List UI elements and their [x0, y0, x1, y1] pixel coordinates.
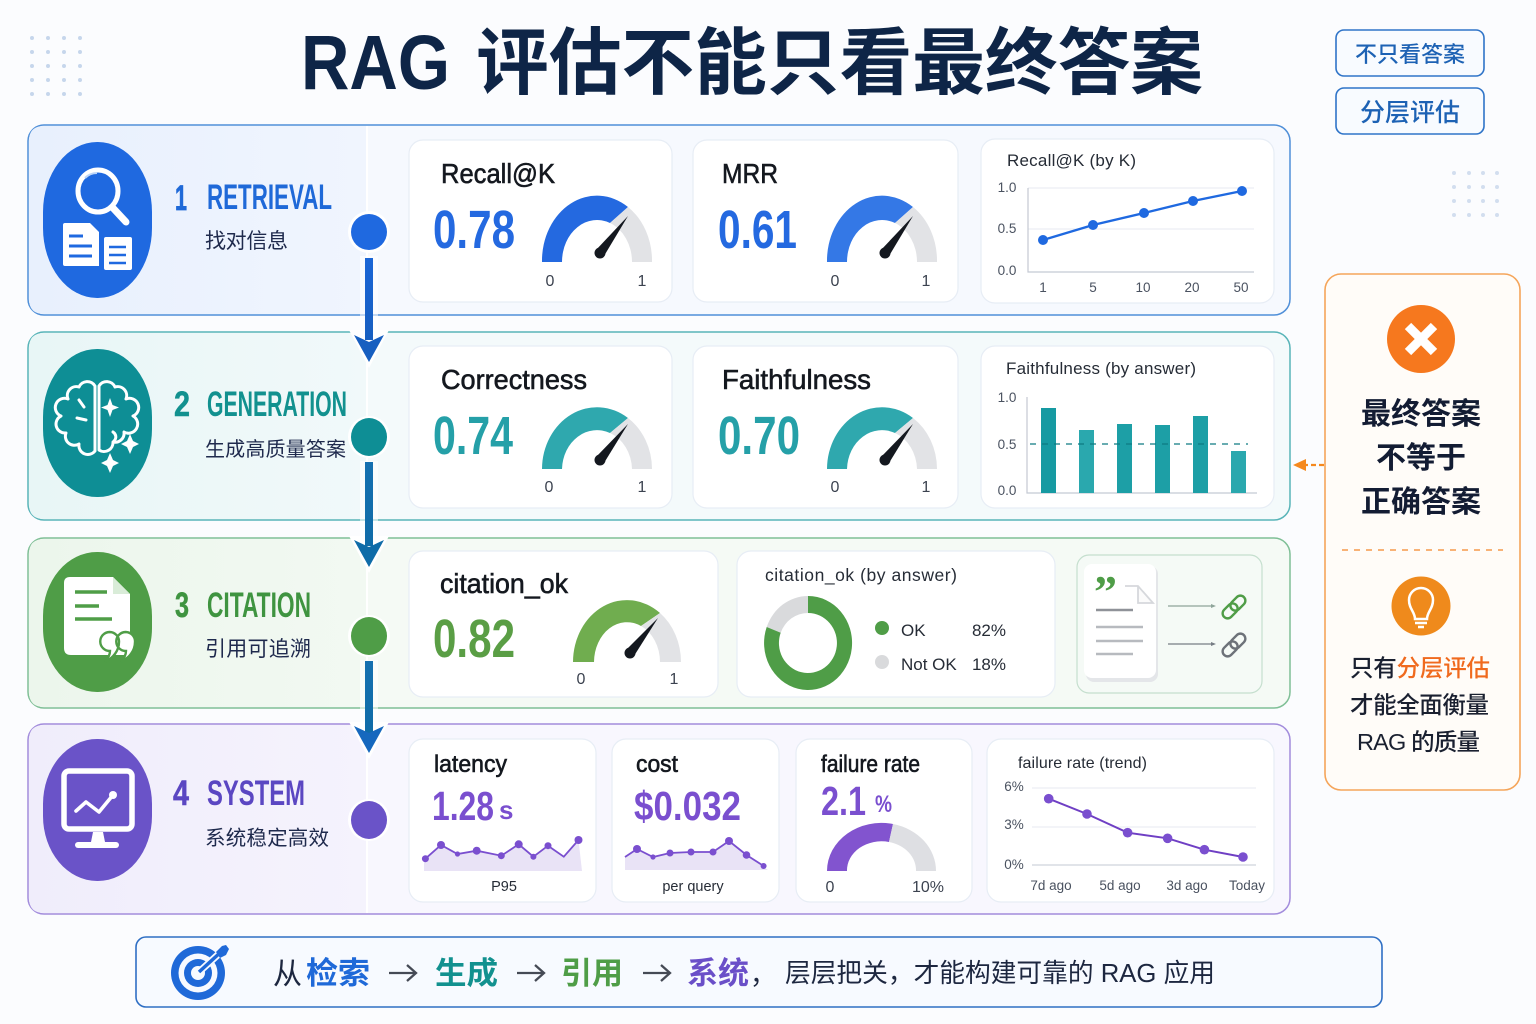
card: failure rate [796, 739, 972, 902]
card: latency [409, 739, 596, 902]
card: failure rate: 2.1 [821, 778, 866, 824]
gauge: 0.74 [542, 407, 652, 469]
card: Correctness [409, 346, 672, 508]
text: conclusion sentence: ， [750, 955, 776, 992]
panel: conclusion callout [1325, 274, 1520, 790]
text: final answer is not correct answer [1361, 398, 1481, 519]
title: RAG [301, 20, 450, 106]
arrows between stages [389, 965, 670, 981]
line chart: failure rate trend: 3d ago [1166, 878, 1208, 893]
sparkline: latency [422, 836, 582, 871]
gauge: 0.78 [542, 196, 652, 262]
tag: 不只看答案 [1336, 30, 1484, 76]
panel: system [28, 724, 1290, 914]
text: layered evaluation: RAG 的质量 [1357, 729, 1480, 755]
bar chart: Faithfulness by answer: 0.0 [998, 483, 1016, 498]
sparkline: cost [625, 837, 768, 870]
card: Recall@K: 0.78 [433, 200, 515, 260]
icon: cross [1387, 305, 1455, 373]
line chart: Recall@K by K: 50 [1233, 280, 1249, 295]
line chart: failure rate trend: Today [1229, 878, 1265, 893]
heading: generation: 2 [174, 385, 190, 424]
panel: retrieval [28, 125, 1290, 315]
heading: generation [174, 385, 347, 462]
card: MRR [693, 140, 958, 302]
card: Faithfulness: 0.70 [718, 406, 800, 466]
heading: system: 4 [173, 774, 189, 813]
card: Correctness: 0.74 [433, 406, 513, 466]
icon: magnifier and documents [43, 142, 152, 298]
decorative dots: top left [30, 36, 82, 96]
text: conclusion sentence: 从 [273, 949, 302, 993]
card: cost [612, 739, 779, 902]
legend [875, 621, 1006, 674]
line chart: failure rate trend: 5d ago [1099, 878, 1141, 893]
bar chart: Faithfulness by answer: 1.0 [998, 390, 1016, 405]
line chart: failure rate trend: 7d ago [1030, 878, 1072, 893]
bar chart: Faithfulness by answer: Faithfulness (by answer) [1006, 359, 1196, 378]
illustration: citation document and links [1077, 555, 1262, 693]
line chart: Recall@K by K: 5 [1089, 280, 1097, 295]
card: MRR: 0.61 [718, 200, 797, 260]
legend: 18% [972, 655, 1006, 674]
line chart: Recall@K by K: 1.0 [998, 180, 1016, 195]
heading: system: 系统稳定高效 [205, 821, 329, 851]
donut chart: citation_ok by answer: citation_ok (by answer) [765, 565, 957, 586]
bar chart: Faithfulness by answer [981, 346, 1274, 508]
heading: retrieval: 1 [175, 179, 187, 218]
text: layered evaluation [1350, 655, 1490, 755]
card: failure rate: % [875, 791, 892, 818]
card: failure rate: 0 [826, 879, 835, 896]
legend: 82% [972, 621, 1006, 640]
line chart: failure rate trend: 6% [1004, 779, 1024, 794]
line chart: Recall@K by K [981, 139, 1274, 303]
card: latency: P95 [491, 879, 517, 895]
line chart: Recall@K by K: 20 [1184, 280, 1200, 295]
card: citation_ok: citation_ok [440, 568, 569, 599]
card: Recall@K: 1 [638, 273, 647, 290]
text: conclusion sentence: 检索 [306, 948, 370, 993]
card: Recall@K: 0 [546, 273, 555, 290]
text: conclusion sentence [273, 948, 1215, 993]
gauge: 0.61 [827, 196, 937, 262]
card: cost: per query [662, 879, 724, 895]
card: Faithfulness: 1 [922, 479, 931, 496]
card: latency: latency [434, 751, 507, 778]
heading: citation [175, 586, 311, 663]
card: MRR: 1 [922, 273, 931, 290]
line chart: Recall@K by K: 1 [1039, 280, 1047, 295]
card: failure rate: 10% [912, 879, 944, 896]
text: final answer is not correct answer: 最终答案 [1361, 398, 1481, 431]
gauge: failure rate [827, 823, 936, 871]
legend: OK [901, 621, 926, 640]
card: latency: 1.28 [432, 783, 494, 829]
card: cost: cost [636, 751, 678, 778]
icon: lightbulb [1392, 576, 1450, 636]
arrow: retrieval to generation [348, 211, 390, 368]
title: 评估不能只看最终答案 [476, 4, 1203, 110]
card: Recall@K [409, 140, 672, 302]
card: MRR: MRR [722, 158, 778, 189]
line chart: failure rate trend: 3% [1004, 817, 1024, 832]
gauge: 0.70 [827, 407, 937, 469]
text: final answer is not correct answer: 不等于 [1376, 442, 1466, 475]
text: conclusion sentence: 生成 [435, 948, 498, 993]
heading: citation: 引用可追溯 [205, 633, 311, 663]
line chart: failure rate trend: failure rate (trend) [1018, 755, 1147, 772]
icon: document with quote [43, 552, 152, 692]
heading: retrieval: 找对信息 [205, 225, 288, 255]
gauge: 0.82 [573, 600, 681, 662]
arrow: citation to system [348, 615, 390, 759]
arrow: generation to citation [348, 416, 390, 573]
icon: gray link [1221, 632, 1247, 658]
heading: citation: CITATION [207, 586, 311, 625]
arrow: callout to panels [1293, 459, 1324, 471]
card: Correctness: 1 [638, 479, 647, 496]
bar chart: Faithfulness by answer: 0.5 [998, 437, 1016, 452]
node: system [348, 799, 390, 841]
icon: monitor [43, 739, 152, 881]
line chart: Recall@K by K: 0.5 [998, 221, 1016, 236]
card: Faithfulness [693, 346, 958, 508]
card: latency: s [499, 795, 513, 825]
panel: generation [28, 332, 1290, 520]
text: layered evaluation: 才能全面衡量 [1350, 692, 1489, 718]
text: conclusion sentence: 系统 [687, 948, 749, 993]
legend: Not OK [901, 655, 957, 674]
text: final answer is not correct answer: 正确答案 [1361, 486, 1481, 519]
tag: 分层评估: 分层评估 [1360, 93, 1460, 129]
line chart: failure rate trend: 0% [1004, 857, 1024, 872]
line chart: Recall@K by K: 10 [1135, 280, 1151, 295]
card: Correctness: 0 [545, 479, 554, 496]
heading: citation: 3 [175, 586, 189, 625]
card: citation_ok [409, 551, 718, 697]
card: Recall@K: Recall@K [441, 158, 555, 189]
card: failure rate: failure rate [821, 751, 920, 778]
icon: green link [1221, 594, 1247, 620]
card: Faithfulness: Faithfulness [722, 364, 871, 395]
text: conclusion sentence: 引用 [561, 948, 623, 993]
decorative dots: top right [1452, 171, 1499, 217]
donut chart: citation_ok by answer [737, 551, 1055, 697]
heading: retrieval: RETRIEVAL [207, 178, 332, 217]
card: citation_ok: 0 [577, 671, 586, 688]
text: conclusion sentence: 层层把关，才能构建可靠的 RAG 应用 [785, 958, 1215, 988]
card: citation_ok: 0.82 [433, 609, 515, 669]
text: layered evaluation: 只有分层评估 [1350, 655, 1490, 681]
icon: target [171, 945, 229, 1000]
card: cost: $0.032 [634, 783, 741, 829]
heading: generation: GENERATION [207, 385, 347, 424]
card: citation_ok: 1 [670, 671, 679, 688]
line chart: failure rate trend [987, 739, 1274, 902]
card: Faithfulness: 0 [831, 479, 840, 496]
heading: system [173, 774, 329, 851]
tag: 不只看答案: 不只看答案 [1355, 37, 1465, 69]
panel: citation [28, 538, 1290, 708]
summary bar [136, 937, 1382, 1007]
illustration: citation document and links: ” [1094, 566, 1117, 617]
line chart: Recall@K by K: Recall@K (by K) [1007, 151, 1136, 170]
heading: system: SYSTEM [207, 774, 305, 813]
icon: brain [43, 349, 152, 497]
card: MRR: 0 [831, 273, 840, 290]
heading: generation: 生成高质量答案 [205, 433, 346, 462]
line chart: Recall@K by K: 0.0 [998, 263, 1016, 278]
heading: retrieval [175, 178, 332, 255]
tag: 分层评估 [1336, 88, 1484, 134]
card: Correctness: Correctness [441, 364, 587, 395]
